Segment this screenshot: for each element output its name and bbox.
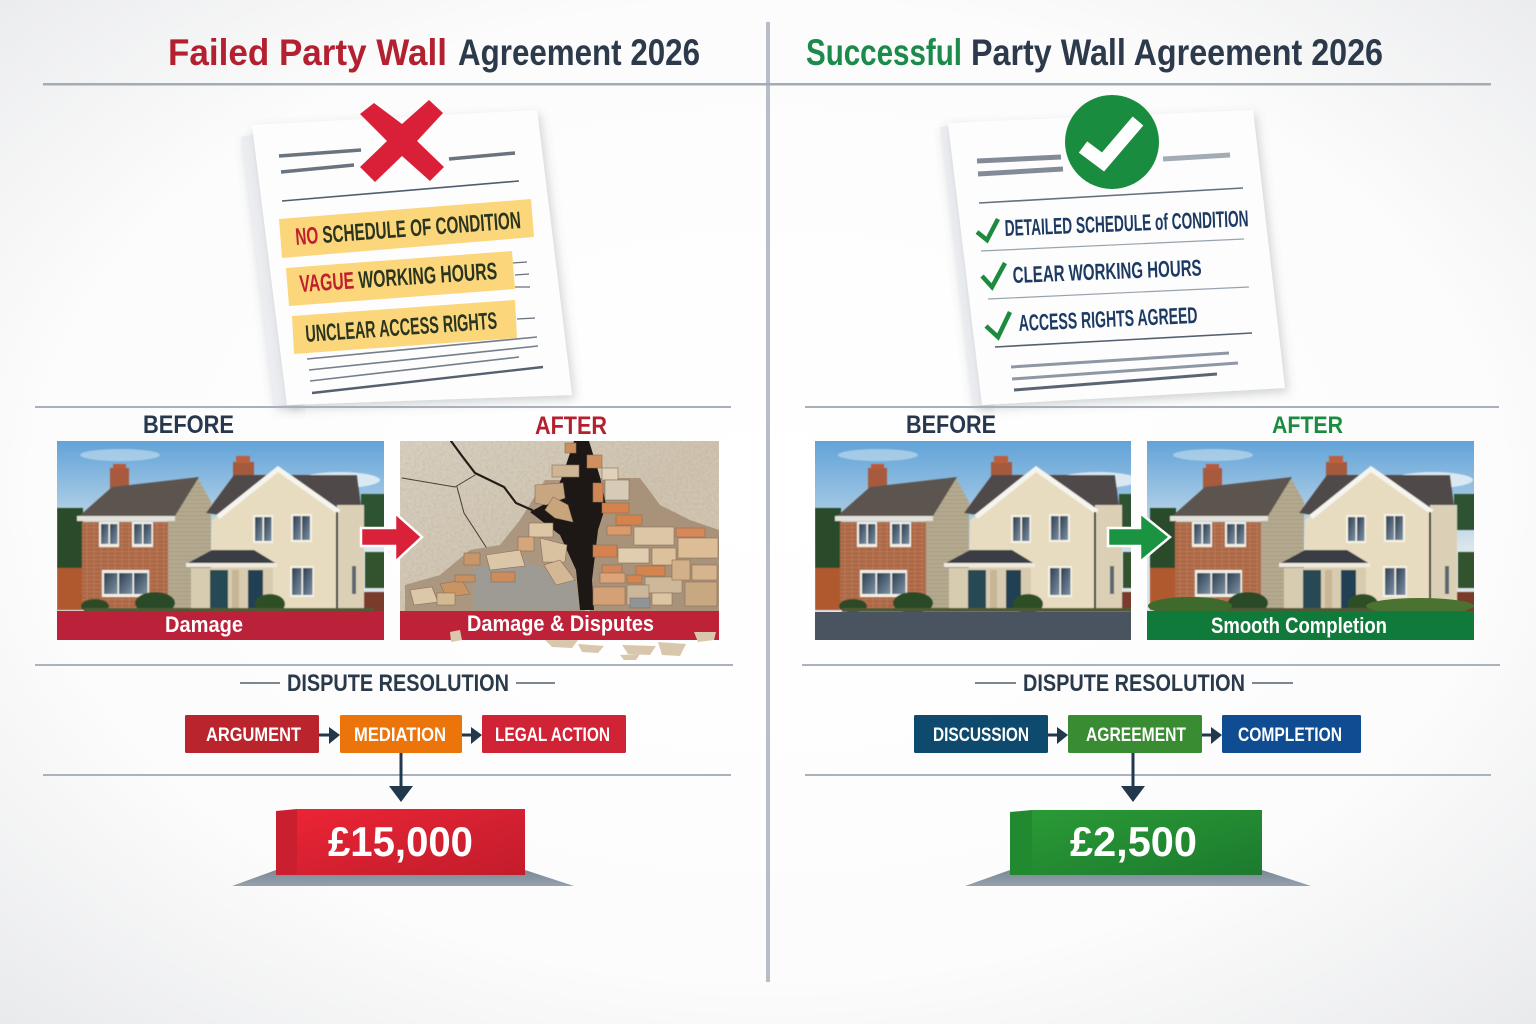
flow: argument, mediation, legal action <box>185 715 626 753</box>
checklist item: access rights agreed <box>986 302 1198 337</box>
checklist item: clear working hours <box>982 254 1202 288</box>
flow: argument, mediation, legal action: MEDIATION <box>354 725 446 746</box>
flow: discussion, agreement, completion: AGREEMENT <box>1086 725 1186 746</box>
checklist item: access rights agreed: ACCESS RIGHTS AGREED <box>1018 302 1198 336</box>
photo: houses before damage <box>57 441 387 640</box>
right panel: successful agreement <box>768 32 1500 886</box>
highlighted item: no schedule of condition: NO SCHEDULE OF CONDITION <box>294 207 522 251</box>
highlighted item: unclear access rights <box>292 300 517 354</box>
heading: dispute resolution (failed): DISPUTE RESOLUTION <box>287 670 509 697</box>
label: after: AFTER <box>1272 412 1343 439</box>
arrow: before to after (red) <box>361 513 422 562</box>
heading: failed: Agreement 2026 <box>458 32 700 73</box>
highlighted item: vague working hours: VAGUE WORKING HOURS <box>299 258 498 298</box>
photo: cracked party wall after damage: Damage & Disputes <box>467 611 654 636</box>
icon: red cross <box>360 100 444 182</box>
photo: cracked party wall after damage <box>400 441 719 660</box>
photo: houses after smooth completion: Smooth Completion <box>1211 613 1387 638</box>
arrow: down to cost <box>1121 753 1145 802</box>
arrow: down to cost <box>389 753 413 802</box>
flow: discussion, agreement, completion <box>914 715 1361 753</box>
cost block: 2,500: £2,500 <box>1070 818 1197 865</box>
checklist item: detailed schedule of condition <box>977 205 1249 241</box>
cost block: 15,000 <box>232 809 574 886</box>
left panel: failed agreement <box>35 32 768 886</box>
flow: argument, mediation, legal action: ARGUMENT <box>206 725 301 746</box>
checklist item: detailed schedule of condition: DETAILED SCHEDULE of CONDITION <box>1004 205 1249 241</box>
checklist item: clear working hours: CLEAR WORKING HOURS <box>1012 254 1202 288</box>
highlighted item: vague working hours <box>286 251 515 306</box>
icon: green check badge <box>1065 95 1159 189</box>
cost block: 2,500 <box>965 810 1311 886</box>
photo: houses before works <box>815 441 1145 640</box>
rubble below banner <box>450 630 716 660</box>
flow: discussion, agreement, completion: DISCUSSION <box>933 725 1029 746</box>
center divider <box>766 22 770 982</box>
highlighted item: no schedule of condition <box>279 199 534 258</box>
photo: houses after smooth completion <box>1147 441 1480 640</box>
document: failed checklist <box>241 100 572 405</box>
label: after: AFTER <box>535 412 607 440</box>
label: before: BEFORE <box>906 411 996 439</box>
flow: argument, mediation, legal action: LEGAL ACTION <box>495 725 610 746</box>
photo: houses before damage: Damage <box>165 612 243 637</box>
heading: successful: Successful <box>806 32 962 73</box>
heading: dispute resolution (successful): DISPUTE RESOLUTION <box>1023 670 1245 697</box>
label: before: BEFORE <box>143 411 234 439</box>
heading: successful: Party Wall Agreement 2026 <box>971 32 1383 73</box>
flow: discussion, agreement, completion: COMPLETION <box>1238 725 1342 746</box>
cost block: 15,000: £15,000 <box>328 818 473 865</box>
arrow: before to after (green) <box>1108 513 1170 562</box>
highlighted item: unclear access rights: UNCLEAR ACCESS RIGHTS <box>305 308 498 348</box>
heading: failed: Failed Party Wall <box>168 32 447 73</box>
document: successful checklist <box>940 95 1285 405</box>
